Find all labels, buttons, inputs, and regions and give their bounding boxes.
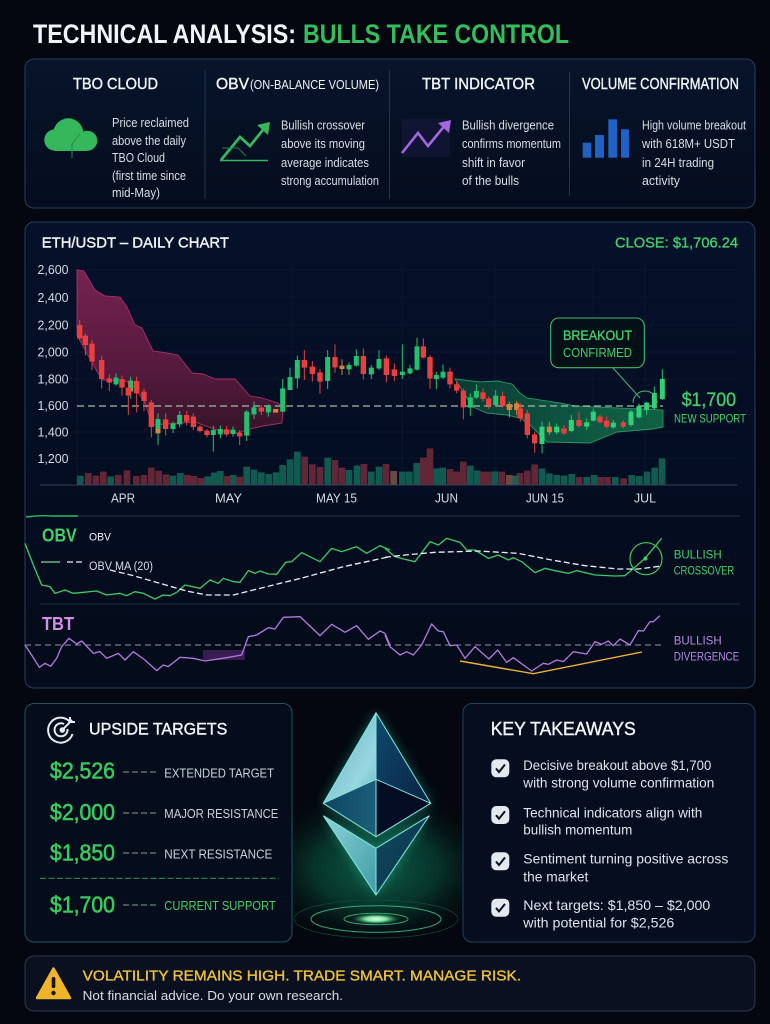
current support: CURRENT SUPPORT	[164, 898, 276, 913]
OBV column: (ON-BALANCE VOLUME)	[250, 78, 379, 92]
text block: TBT: shift in favor	[462, 156, 525, 170]
text block: volume	[641, 118, 746, 188]
OBV moving average	[110, 551, 662, 595]
date axis labels: APR	[111, 490, 135, 506]
takeaway 2: Technical indicators align with	[523, 804, 702, 820]
TBT line	[25, 616, 660, 671]
platform rings	[294, 900, 458, 938]
disclaimer: Not financial advice. Do your own research.	[83, 988, 343, 1003]
price axis labels: 1,200	[38, 451, 68, 466]
icon: purple rising chart	[402, 119, 451, 157]
target: extended: $2,526	[50, 758, 115, 784]
price axis labels: 2,400	[38, 290, 68, 305]
chart heading: ETH/USDT – DAILY CHART	[42, 235, 229, 252]
target: extended: EXTENDED TARGET	[164, 765, 274, 780]
volume confirmation column	[582, 76, 746, 188]
callout: breakout confirmed: BREAKOUT	[563, 328, 632, 343]
price axis labels: 1,600	[38, 398, 68, 413]
target: next resistance: $1,850	[50, 840, 115, 866]
icon: blue bars	[583, 119, 629, 158]
text block: OBV: Bullish crossover	[281, 118, 365, 132]
title: TECHNICAL ANALYSIS:	[33, 19, 296, 49]
text block: TBT: confirms momentum	[462, 137, 561, 151]
callout: breakout confirmed	[551, 318, 657, 403]
OBV legend: OBV	[89, 532, 112, 544]
panel: upside targets	[25, 704, 292, 942]
takeaway 2	[491, 804, 702, 838]
TBT indicator column	[402, 76, 561, 188]
callout: breakout confirmed: CONFIRMED	[563, 346, 632, 360]
label: bullish divergence: DIVERGENCE	[674, 650, 739, 664]
target: next resistance	[50, 840, 273, 866]
panel: indicator summary	[25, 59, 755, 208]
TBT sub-chart	[25, 614, 739, 674]
takeaway 4: Next targets: $1,850 – $2,000	[523, 897, 711, 913]
text block: TBO cloud: above the daily	[112, 134, 187, 148]
date axis labels: MAY	[215, 490, 242, 506]
text block: TBO cloud: (first time since	[112, 169, 186, 183]
date axis labels: MAY 15	[316, 490, 357, 506]
OBV legend: OBV MA (20)	[89, 561, 153, 573]
OBV legend	[41, 532, 153, 573]
text block: TBT: of the bulls	[462, 174, 519, 188]
takeaway 1: Decisive breakout above $1,700	[523, 757, 711, 773]
price axis labels	[38, 262, 68, 466]
text block: OBV: above its moving	[281, 137, 365, 151]
text block: OBV: average indicates	[281, 156, 369, 170]
takeaway 1: with strong volume confirmation	[522, 775, 714, 791]
icon: ethereum logo with platform	[294, 713, 458, 938]
text block: OBV: strong accumulation	[281, 174, 379, 188]
price axis labels: 1,800	[38, 372, 68, 386]
target: major resistance: $2,000	[50, 799, 115, 825]
price axis labels: 2,000	[38, 344, 68, 360]
bearish red cloud	[77, 270, 283, 433]
text block: TBO cloud: Price reclaimed	[112, 116, 189, 130]
date axis labels	[111, 490, 656, 506]
title	[33, 19, 569, 49]
volume bars	[80, 448, 662, 485]
date axis labels: JUL	[634, 490, 656, 506]
title: BULLS TAKE CONTROL	[303, 19, 569, 49]
TBO cloud column: TBO CLOUD	[73, 76, 158, 93]
label: bullish crossover: BULLISH	[674, 547, 722, 561]
support dashed line	[77, 405, 663, 407]
takeaway 3	[491, 851, 728, 884]
label: bullish crossover	[674, 547, 735, 577]
heading: KEY TAKEAWAYS	[491, 718, 636, 739]
target: next resistance: NEXT RESISTANCE	[164, 846, 273, 861]
OBV sub-chart	[25, 516, 735, 599]
takeaway 4	[491, 897, 711, 931]
text block: volume: with 618M+ USDT	[641, 137, 735, 151]
price axis labels: 1,400	[38, 424, 68, 440]
close price: CLOSE: $1,706.24	[615, 235, 738, 252]
chart baseline	[40, 484, 737, 486]
panel: key takeaways	[463, 704, 755, 942]
divergence trend line	[460, 652, 642, 674]
date axis labels: JUN 15	[526, 490, 564, 506]
background glow behind ethereum logo	[251, 786, 501, 950]
heading: UPSIDE TARGETS	[89, 720, 227, 739]
label: new support	[674, 390, 746, 426]
icon: warning triangle	[37, 968, 70, 998]
panel: price and indicator charts	[25, 222, 755, 688]
current support: $1,700	[50, 891, 115, 917]
label: new support: $1,700	[682, 390, 736, 411]
bullish green cloud	[455, 379, 663, 443]
label: bullish divergence	[674, 633, 739, 664]
current support	[50, 891, 276, 917]
OBV sub-chart: OBV	[42, 526, 77, 546]
takeaway 3: Sentiment turning positive across	[523, 851, 728, 867]
warning headline: VOLATILITY REMAINS HIGH. TRADE SMART. MANAGE RISK.	[83, 968, 521, 985]
bullish crossover marker	[630, 543, 662, 575]
TBO cloud column	[44, 76, 189, 200]
OBV column	[216, 76, 379, 188]
price axis labels: 2,600	[38, 262, 68, 277]
TBT indicator column: TBT INDICATOR	[422, 76, 535, 93]
date axis labels: JUN	[435, 490, 458, 506]
text block: TBT	[462, 118, 561, 188]
TBT sub-chart: TBT	[42, 614, 74, 634]
OBV line	[25, 538, 662, 599]
text block: TBT: Bullish divergence	[462, 118, 554, 132]
text block: volume: activity	[642, 174, 681, 188]
text block: volume: in 24H trading	[642, 156, 714, 170]
target: extended	[50, 758, 274, 784]
target: major resistance: MAJOR RESISTANCE	[164, 806, 279, 821]
text block: OBV	[281, 118, 379, 188]
takeaway 2: bullish momentum	[523, 822, 632, 838]
takeaway 4: with potential for $2,526	[522, 915, 675, 931]
takeaway 3: the market	[523, 868, 588, 884]
label: bullish crossover: CROSSOVER	[674, 563, 735, 577]
icon: target	[48, 717, 75, 743]
icon: rising green arrow	[220, 122, 270, 160]
text block: TBO cloud: mid-May)	[112, 186, 160, 200]
panel: risk warning	[25, 956, 755, 1011]
text block: TBO cloud	[112, 116, 189, 200]
takeaway 1	[491, 757, 714, 791]
icon: green cloud	[44, 118, 97, 158]
candlesticks	[80, 320, 662, 453]
label: new support: NEW SUPPORT	[674, 414, 746, 426]
text block: volume: High volume breakout	[642, 118, 746, 132]
price axis labels: 2,200	[38, 318, 68, 332]
label: bullish divergence: BULLISH	[674, 633, 722, 647]
OBV column: OBV	[216, 76, 249, 93]
target: major resistance	[50, 799, 279, 825]
text block: TBO cloud: TBO Cloud	[112, 151, 165, 165]
